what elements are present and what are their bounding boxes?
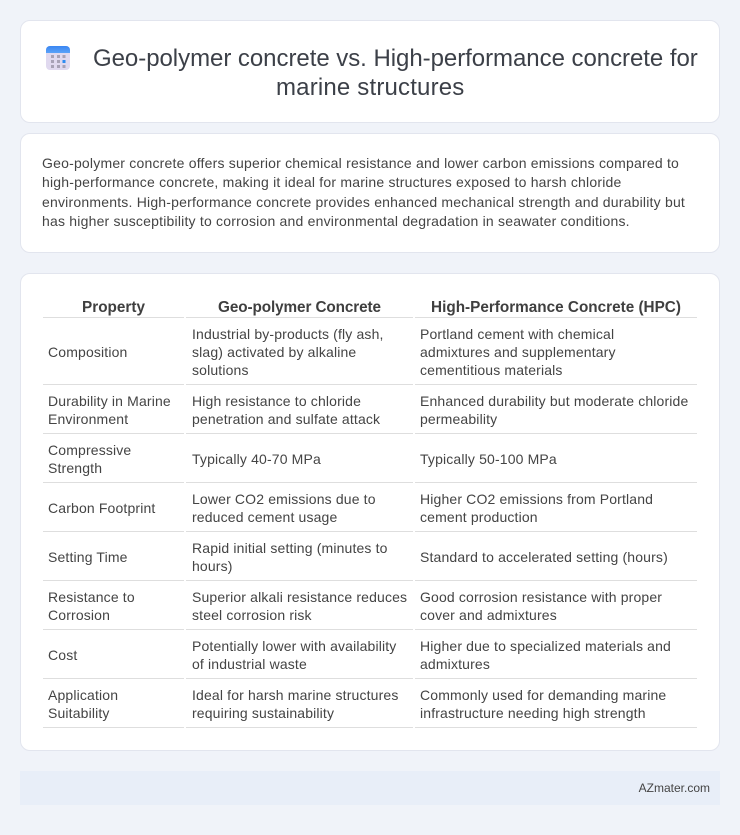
icon: calendar	[46, 46, 70, 70]
intro text: high-performance concrete, making it ideal for marine structures exposed to harsh chloride	[42, 174, 622, 190]
composition: geo-polymer: Industrial by-products (fly ash,	[192, 326, 384, 342]
row: compressive strength	[48, 442, 131, 476]
intro text	[42, 155, 685, 229]
setting time: geo-polymer: hours)	[192, 558, 233, 574]
application suitability: geo-polymer	[192, 687, 398, 721]
carbon footprint: HPC	[420, 491, 653, 525]
intro text: has higher susceptibility to corrosion and environmental degradation in seawater conditions.	[42, 213, 630, 229]
intro text: Geo-polymer concrete offers superior chemical resistance and lower carbon emissions compared to	[42, 155, 679, 171]
cost: geo-polymer	[192, 638, 396, 672]
row: durability	[48, 393, 171, 427]
row: application suitability	[48, 687, 118, 721]
compressive strength: geo-polymer: Typically 40-70 MPa	[192, 451, 321, 467]
row: carbon footprint: Carbon Footprint	[48, 500, 155, 516]
durability: HPC: Enhanced durability but moderate chloride	[420, 393, 688, 409]
durability: HPC	[420, 393, 688, 427]
carbon footprint: geo-polymer	[192, 491, 376, 525]
footer bar	[20, 771, 720, 805]
application suitability: HPC: infrastructure needing high strength	[420, 705, 646, 721]
panel: title card	[20, 20, 720, 123]
carbon footprint: HPC: cement production	[420, 509, 538, 525]
resistance to corrosion: geo-polymer: Superior alkali resistance reduces	[192, 589, 407, 605]
composition: HPC	[420, 326, 616, 378]
resistance to corrosion: geo-polymer: steel corrosion risk	[192, 607, 312, 623]
setting time: geo-polymer: Rapid initial setting (minutes to	[192, 540, 388, 556]
title second line: marine structures	[276, 74, 464, 101]
row: resistance to corrosion: Resistance to	[48, 589, 135, 605]
setting time: HPC: Standard to accelerated setting (hours)	[420, 549, 668, 565]
footer credit: AZmater.com	[639, 781, 710, 795]
durability: geo-polymer	[192, 393, 380, 427]
resistance to corrosion: HPC: Good corrosion resistance with proper	[420, 589, 662, 605]
resistance to corrosion: HPC: cover and admixtures	[420, 607, 557, 623]
table header: property: Property	[82, 299, 145, 316]
compressive strength: HPC: Typically 50-100 MPa	[420, 451, 557, 467]
table header: geo-polymer concrete: Geo-polymer Concrete	[218, 299, 381, 316]
composition: HPC: cementitious materials	[420, 362, 563, 378]
resistance to corrosion: HPC	[420, 589, 662, 623]
cost: geo-polymer: Potentially lower with availability	[192, 638, 396, 654]
title: Geo-polymer concrete vs. High-performance concrete for	[93, 45, 698, 72]
row: compressive strength: Strength	[48, 460, 102, 476]
row: application suitability: Application	[48, 687, 118, 703]
panel: comparison table	[20, 273, 720, 751]
carbon footprint: geo-polymer: reduced cement usage	[192, 509, 337, 525]
row: resistance to corrosion	[48, 589, 135, 623]
cost: HPC: Higher due to specialized materials and	[420, 638, 671, 654]
carbon footprint: HPC: Higher CO2 emissions from Portland	[420, 491, 653, 507]
cost: HPC: admixtures	[420, 656, 490, 672]
setting time: geo-polymer	[192, 540, 388, 574]
row: durability: Environment	[48, 411, 128, 427]
row: compressive strength: Compressive	[48, 442, 131, 458]
row: application suitability: Suitability	[48, 705, 110, 721]
cost: geo-polymer: of industrial waste	[192, 656, 307, 672]
row: setting time: Setting Time	[48, 549, 128, 565]
row: durability: Durability in Marine	[48, 393, 171, 409]
intro text: environments. High-performance concrete provides enhanced mechanical strength and durability but	[42, 194, 685, 210]
composition: geo-polymer	[192, 326, 384, 378]
row: resistance to corrosion: Corrosion	[48, 607, 110, 623]
row: cost: Cost	[48, 647, 77, 663]
composition: geo-polymer: slag) activated by alkaline	[192, 344, 356, 360]
durability: geo-polymer: penetration and sulfate attack	[192, 411, 380, 427]
resistance to corrosion: geo-polymer	[192, 589, 407, 623]
carbon footprint: geo-polymer: Lower CO2 emissions due to	[192, 491, 376, 507]
composition: HPC: admixtures and supplementary	[420, 344, 616, 360]
composition: geo-polymer: solutions	[192, 362, 249, 378]
durability: HPC: permeability	[420, 411, 497, 427]
application suitability: geo-polymer: Ideal for harsh marine structures	[192, 687, 398, 703]
application suitability: HPC	[420, 687, 666, 721]
application suitability: geo-polymer: requiring sustainability	[192, 705, 334, 721]
composition: HPC: Portland cement with chemical	[420, 326, 614, 342]
row: composition: Composition	[48, 344, 127, 360]
table header: high-performance concrete: High-Performance Concrete (HPC)	[431, 299, 681, 316]
panel: introduction	[20, 133, 720, 253]
cost: HPC	[420, 638, 671, 672]
application suitability: HPC: Commonly used for demanding marine	[420, 687, 666, 703]
durability: geo-polymer: High resistance to chloride	[192, 393, 361, 409]
